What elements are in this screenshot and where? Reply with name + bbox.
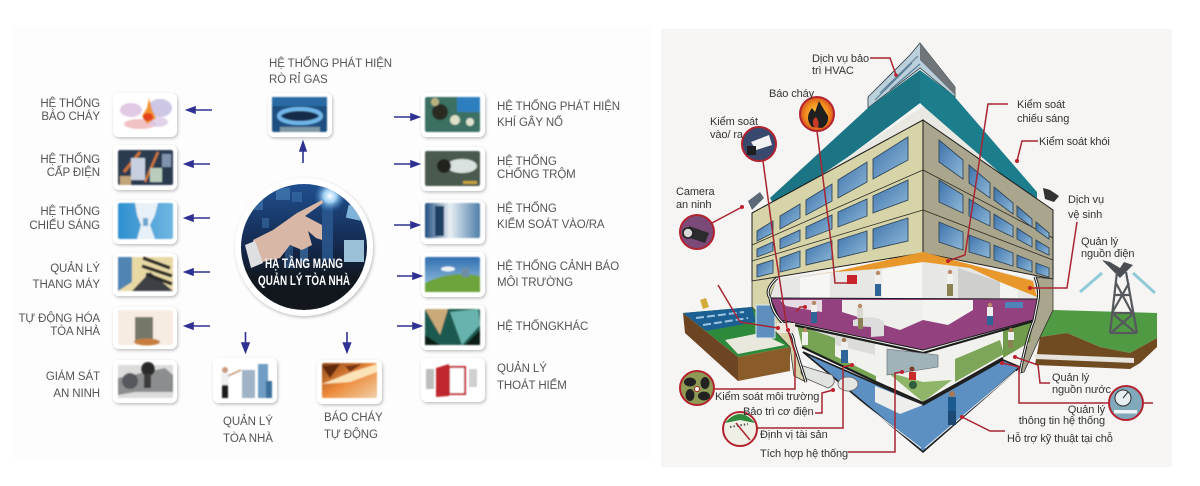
label: water management: nguồn nước (1052, 384, 1111, 396)
teal roof band (770, 70, 1037, 212)
label: environmental alarm system: MÔI TRƯỜNG (497, 276, 573, 289)
label: cleaning service: Dịch vụ (1068, 194, 1104, 206)
label: security camera: Camera (676, 186, 715, 198)
label: fire alarm system: BÁO CHÁY (41, 110, 100, 123)
tile: gas leak detection (268, 93, 332, 137)
wall alarm box (847, 275, 857, 284)
tile: automatic fire alarm (317, 360, 382, 404)
facade left (752, 120, 923, 281)
people (802, 270, 1014, 425)
label: automatic fire alarm: TỰ ĐỘNG (324, 428, 378, 441)
tile: emergency exit (421, 358, 485, 402)
lower right wall (1020, 277, 1053, 373)
magenta floor (770, 298, 1038, 350)
arrow: to automatic fire alarm (344, 332, 350, 352)
icon: fire alarm (800, 97, 834, 131)
arrow: to access control (394, 222, 419, 228)
tile: security monitoring (113, 360, 177, 403)
arrow: to fire alarm (187, 107, 212, 113)
tile: fire alarm (113, 93, 177, 137)
label: lighting system: HỆ THỐNG (40, 206, 100, 218)
label: anti-theft system: CHỐNG TRỘM (497, 167, 576, 181)
label: emergency exit management: THOÁT HIỂM (497, 379, 567, 392)
central circle: building management network (235, 178, 373, 316)
white column (875, 386, 923, 414)
tile: explosive gas detection (421, 92, 485, 137)
arrow: to lighting (185, 215, 210, 221)
server racks (887, 349, 938, 375)
label: smoke control: Kiểm soát khói (1039, 136, 1110, 148)
top floor room (770, 253, 1038, 298)
label: environmental alarm system: HỆ THỐNG CẢNH BÁO (497, 261, 619, 273)
blue ground floor (803, 352, 1020, 452)
icon: access control (742, 127, 776, 161)
tile: power supply (113, 145, 177, 190)
label: security monitoring: AN NINH (53, 388, 100, 400)
icon: asset gauge (723, 412, 757, 446)
illustration: building (748, 43, 1059, 452)
icon: security camera (680, 215, 714, 249)
tile: other systems (421, 305, 485, 350)
green floor sections (797, 325, 876, 382)
label: elevator management: THANG MÁY (33, 278, 100, 291)
arrow: to environmental alarm (397, 273, 421, 279)
tile: access control (421, 200, 485, 244)
windows left face (757, 137, 908, 277)
orange ceiling (800, 252, 1037, 297)
label: water management: Quản lý (1052, 372, 1089, 384)
hand pointing (253, 200, 323, 263)
label: environment control: Kiểm soát môi trường (715, 391, 819, 403)
label: mechanical electrical maintenance: Bảo trì cơ điện (743, 406, 814, 418)
windows right face (939, 140, 1049, 277)
label: access control system: HỆ THỐNG (497, 203, 557, 215)
label: system integration: Tích hợp hệ thống (760, 448, 848, 460)
lower left wall (752, 277, 806, 382)
label: system information management: Quản lý (1068, 404, 1105, 416)
label: other systems: HỆ THỐNGKHÁC (497, 319, 588, 333)
tile: anti-theft (421, 147, 485, 191)
label: system information management: thông tin hệ thống (1019, 415, 1105, 427)
label: building automation: TỰ ĐỘNG HÓA (18, 313, 100, 325)
arrow: to other systems (397, 323, 421, 329)
arrow: to building management (242, 332, 249, 352)
label: onsite technical support: Hỗ trợ kỹ thuật tại chỗ (1007, 432, 1113, 445)
arrow: to elevator (185, 269, 210, 275)
central circle: building management network: QUẢN LÝ TÒA NHÀ (258, 271, 350, 288)
label: fire alarm system: HỆ THỐNG (40, 98, 100, 110)
label: power supply system: HỆ THỐNG (40, 154, 100, 166)
facade right (923, 120, 1053, 279)
arrow: to power supply (185, 161, 210, 167)
slab edges (780, 321, 1034, 353)
label: asset location: Định vị tài sản (760, 429, 828, 441)
control boxes (777, 323, 795, 333)
panel: network infrastructure diagram (18, 56, 620, 442)
label: power management: Quản lý (1081, 236, 1118, 248)
label: building management: QUẢN LÝ (223, 416, 273, 428)
label: security monitoring: GIÁM SÁT (46, 371, 100, 383)
icon: environment fan (680, 371, 714, 405)
label: explosive gas detection: HỆ THỐNG PHÁT HIỆN (497, 101, 620, 113)
camera right (1043, 188, 1059, 202)
hvac unit on roof (868, 43, 955, 108)
label: power management: nguồn điện (1081, 248, 1134, 260)
illustration: power pylon (1080, 260, 1155, 333)
icon: system information meter (1109, 386, 1143, 420)
camera left (748, 192, 764, 210)
label: access control: vào/ ra (710, 129, 744, 141)
illustration: right ground with pipe (1035, 310, 1157, 369)
label: access control: Kiểm soát (710, 116, 758, 128)
tile: elevator management (113, 253, 177, 296)
panel: smart building cutaway illustration (661, 29, 1172, 467)
illustration: left ground block (683, 298, 790, 381)
tile: lighting (113, 200, 177, 244)
label: access control system: KIỂM SOÁT VÀO/RA (497, 218, 605, 231)
magenta level rooms (842, 300, 923, 330)
arrow: to anti-theft (394, 161, 419, 167)
label: lighting system: CHIẾU SÁNG (29, 219, 100, 232)
label: explosive gas detection: KHÍ GÂY NỔ (497, 116, 563, 129)
label: building management: TÒA NHÀ (223, 432, 273, 445)
tile: building automation (113, 307, 177, 349)
label: fire alarm: Báo cháy (769, 88, 815, 100)
label: power supply system: CẤP ĐIỆN (47, 166, 100, 179)
parapet (752, 106, 1053, 222)
arrow: to automation (185, 323, 210, 329)
arrow: to explosive gas (394, 114, 419, 120)
glazed entrance (756, 305, 775, 338)
central title: HẠ TẦNG MẠNG (265, 255, 343, 271)
label: lighting control: Kiểm soát (1017, 99, 1065, 111)
label: lighting control: chiếu sáng (1017, 113, 1069, 125)
label: gas leak detection: RÒ RỈ GAS (269, 73, 328, 86)
tile: environmental alarm (421, 252, 485, 297)
leader lines (712, 58, 1153, 452)
label: cleaning service: vệ sinh (1068, 209, 1102, 221)
label: gas leak detection: HỆ THỐNG PHÁT HIỆN (269, 58, 392, 70)
tile: building management (213, 358, 277, 403)
label: automatic fire alarm: BÁO CHÁY (324, 412, 383, 424)
label: elevator management: QUẢN LÝ (50, 263, 100, 275)
arrow: to gas detection (300, 142, 306, 163)
middle level walls (794, 322, 1033, 402)
label: security camera: an ninh (676, 199, 711, 211)
tanks and machinery (801, 366, 834, 388)
label: HVAC maintenance: Dịch vụ bảo (812, 53, 869, 65)
label: anti-theft system: HỆ THỐNG (497, 156, 557, 168)
floor lines on facade (752, 170, 1053, 261)
label: building automation: TÒA NHÀ (50, 325, 100, 338)
label: HVAC maintenance: trì HVAC (812, 65, 854, 77)
label: emergency exit management: QUẢN LÝ (497, 363, 547, 375)
cut lines (768, 278, 806, 382)
